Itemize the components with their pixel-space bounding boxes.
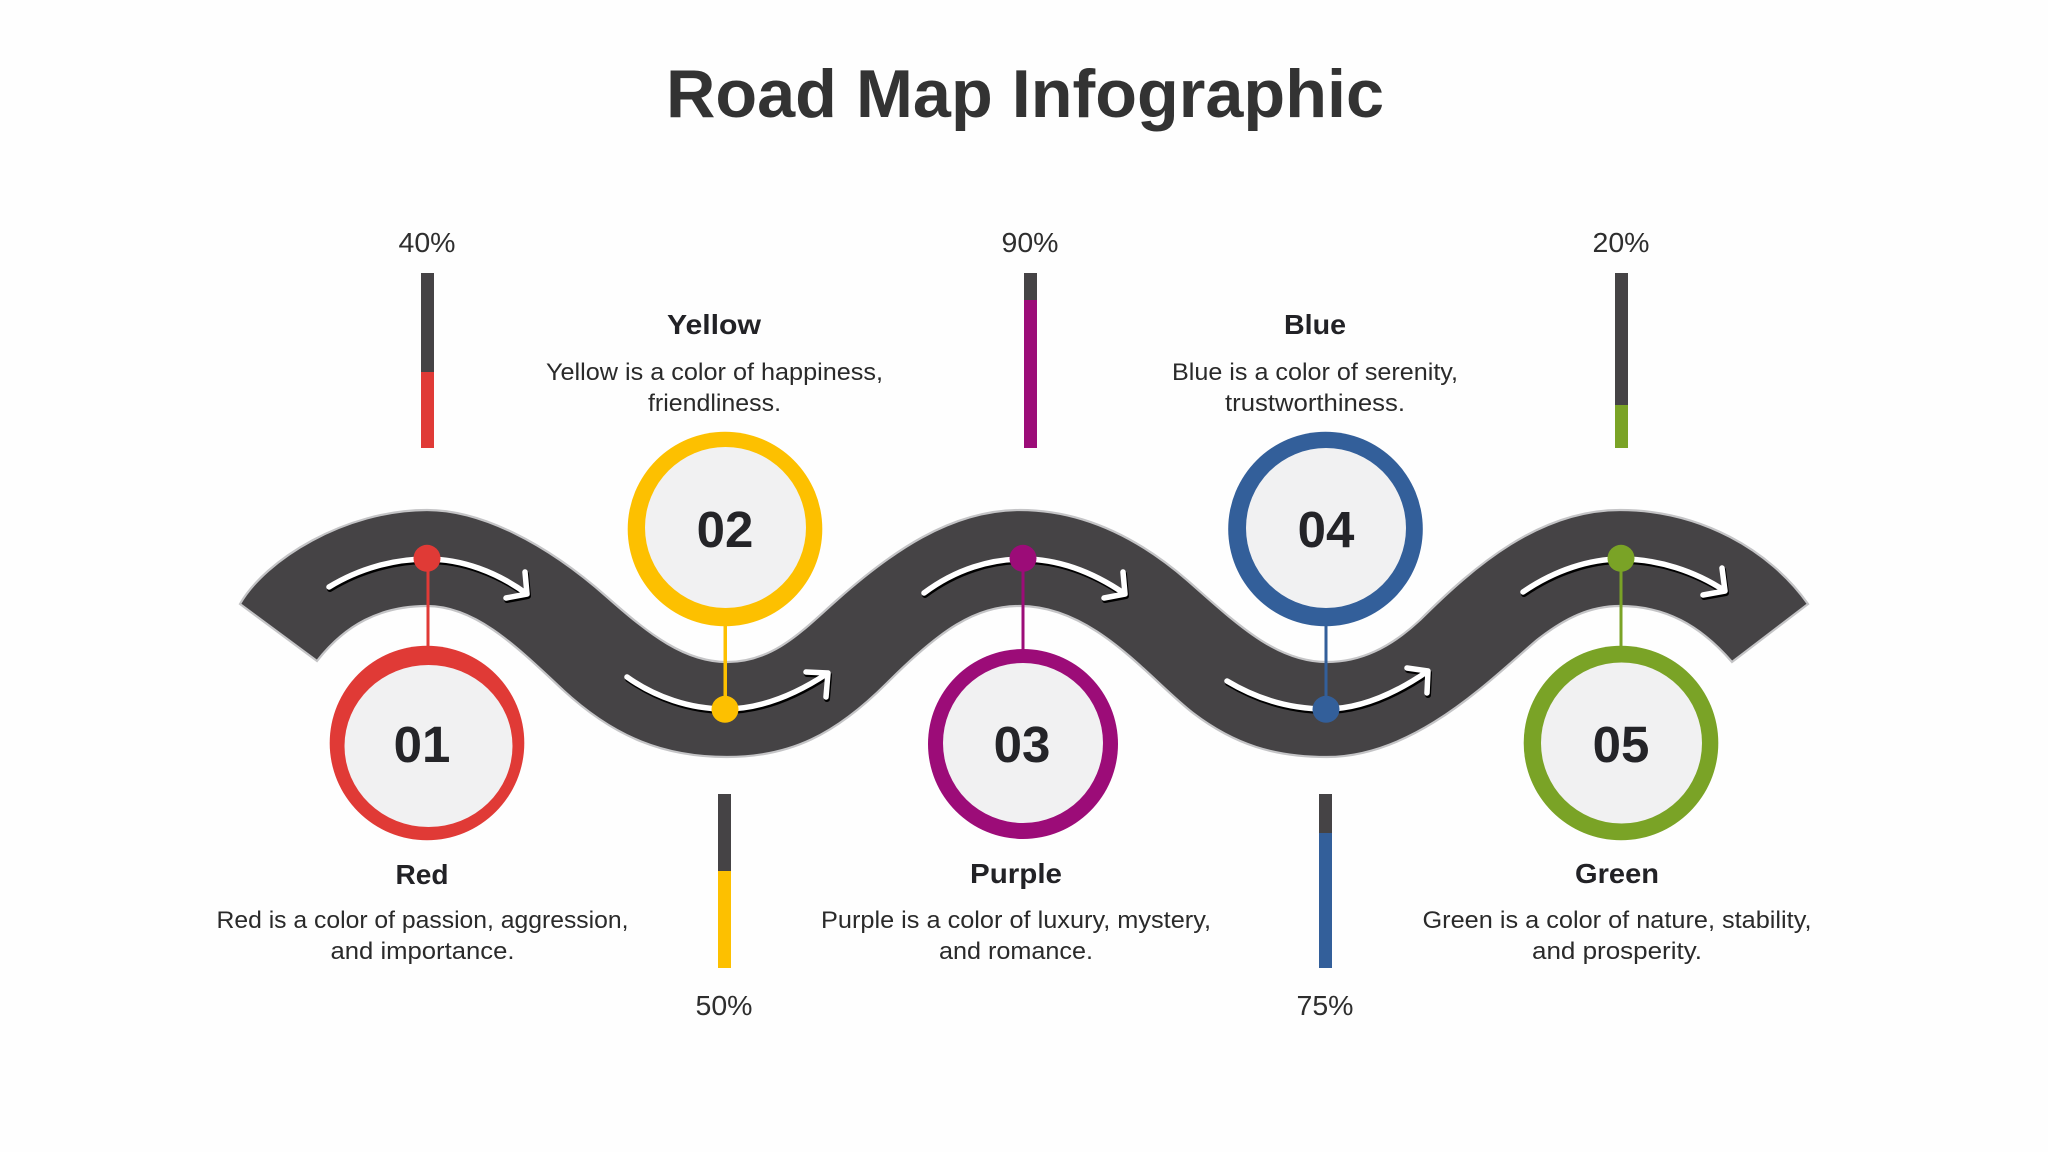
purple description: Purple is a color of luxury, mystery, [821,907,1211,934]
blue numbered circle: 04 [1298,501,1355,558]
yellow percentage: 50% [696,990,752,1021]
yellow progress bar [718,794,731,968]
yellow connector and road marker [712,620,738,723]
yellow description: friendliness. [648,390,781,417]
red connector and road marker [414,545,440,648]
green percentage: 20% [1592,227,1650,258]
red numbered circle [330,646,524,840]
step 02 yellow [546,309,883,1021]
purple numbered circle [928,649,1118,839]
green description: and prosperity. [1532,938,1702,965]
green progress bar [1615,273,1628,448]
green description: Green is a color of nature, stability, [1422,907,1812,934]
step 05 green [1422,227,1812,965]
yellow description: Yellow is a color of happiness, [546,359,883,386]
blue progress bar [1319,794,1332,968]
blue description: Blue is a color of serenity, [1172,359,1458,386]
blue connector and road marker [1312,620,1340,723]
purple heading: Purple [970,858,1062,889]
red numbered circle: 01 [394,716,450,773]
purple progress bar [1024,273,1037,448]
winding road [240,510,1808,757]
step 01 red [216,227,628,965]
yellow numbered circle: 02 [697,501,753,558]
blue heading: Blue [1284,309,1346,340]
arrow 3 on road [924,559,1126,600]
step 03 purple [821,227,1211,965]
red description: Red is a color of passion, aggression, [216,907,628,934]
step 04 blue [1172,309,1458,1021]
yellow numbered circle [628,432,822,626]
red heading: Red [396,859,448,890]
arrow 1 on road [329,559,528,600]
green numbered circle: 05 [1593,716,1649,773]
red percentage: 40% [398,227,456,258]
red progress bar [421,273,434,448]
red description: and importance. [330,938,514,965]
yellow heading: Yellow [667,309,761,340]
purple numbered circle: 03 [994,716,1050,773]
green numbered circle [1524,646,1718,840]
blue percentage: 75% [1296,990,1354,1021]
title: Road Map Infographic [666,56,1384,132]
green connector and road marker [1608,545,1634,648]
purple description: and romance. [939,938,1093,965]
purple connector and road marker [1010,545,1036,650]
arrow 2 on road [627,672,829,711]
arrow 5 on road [1523,559,1726,597]
blue description: trustworthiness. [1225,390,1405,417]
blue numbered circle [1228,432,1423,626]
green heading: Green [1575,858,1659,889]
arrow 4 on road [1227,668,1429,711]
purple percentage: 90% [1002,227,1058,258]
